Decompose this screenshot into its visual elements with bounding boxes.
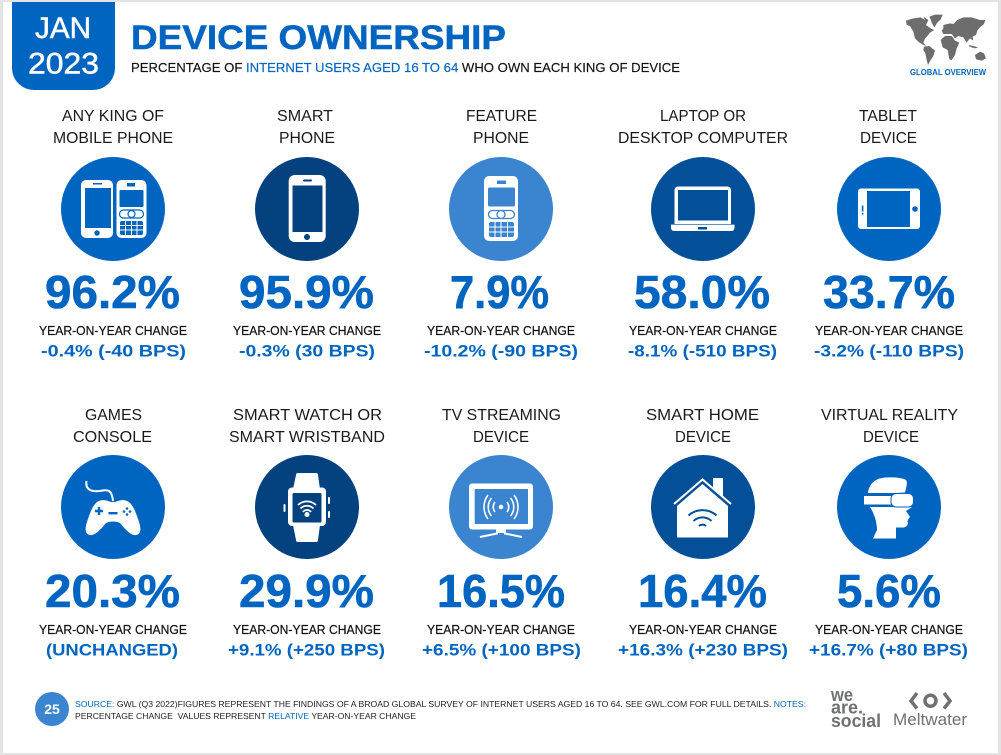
value: 16.4% (638, 565, 767, 617)
icon: tv streaming (449, 455, 553, 559)
panel: laptop or desktop computer (618, 108, 788, 360)
heading: CONSOLE (73, 429, 152, 446)
panel: any king of mobile phone (39, 108, 187, 360)
logo: we are social: social (831, 711, 881, 731)
heading: FEATURE (466, 108, 537, 125)
year-on-year label: YEAR-ON-YEAR CHANGE (233, 623, 381, 637)
heading: TABLET (859, 108, 917, 125)
value: 95.9% (239, 266, 374, 318)
icon: feature phone (449, 157, 553, 261)
global overview label: GLOBAL OVERVIEW (910, 68, 986, 77)
year-on-year label: YEAR-ON-YEAR CHANGE (427, 623, 575, 637)
icon: tablet (837, 157, 941, 261)
icon: world map (906, 15, 986, 65)
date badge: JAN (35, 12, 91, 45)
subtitle: PERCENTAGE OF INTERNET USERS AGED 16 TO 64 WHO OWN EACH KING OF DEVICE (131, 60, 680, 75)
change: +9.1% (+250 BPS) (228, 642, 385, 660)
value: 29.9% (239, 565, 374, 617)
change: (UNCHANGED) (46, 642, 178, 660)
change: -3.2% (-110 BPS) (814, 342, 964, 360)
heading: PHONE (473, 130, 529, 147)
date badge (12, 2, 115, 90)
heading: DESKTOP COMPUTER (618, 130, 788, 147)
panel: virtual reality device (809, 407, 968, 660)
icon: smart watch (255, 455, 359, 559)
panel: games console (39, 407, 187, 660)
change: -0.3% (30 BPS) (239, 342, 375, 360)
panel: smart phone (233, 108, 381, 360)
change: -0.4% (-40 BPS) (41, 342, 186, 360)
icon: laptop (651, 157, 755, 261)
icon: smartphone and feature phone (61, 157, 165, 261)
date badge: 2023 (28, 48, 99, 80)
heading: DEVICE (863, 429, 919, 446)
value: 20.3% (45, 565, 180, 617)
page number: 25 (44, 701, 60, 717)
year-on-year label: YEAR-ON-YEAR CHANGE (233, 324, 381, 338)
heading: DEVICE (473, 429, 529, 446)
icon: vr headset (837, 455, 941, 559)
year-on-year label: YEAR-ON-YEAR CHANGE (427, 324, 575, 338)
heading: SMART WRISTBAND (229, 429, 385, 446)
logo: we are social: are. (831, 698, 863, 718)
change: +6.5% (+100 BPS) (422, 642, 581, 660)
footer source note: PERCENTAGE CHANGE VALUES REPRESENT RELATIVE YEAR-ON-YEAR CHANGE (75, 711, 415, 721)
heading: ANY KING OF (62, 108, 164, 125)
value: 33.7% (823, 266, 955, 318)
icon: smartphone (255, 157, 359, 261)
panel: tablet device (814, 108, 964, 360)
panel: tv streaming device (422, 407, 581, 660)
icon: smart home (651, 455, 755, 559)
value: 58.0% (634, 266, 770, 318)
heading: DEVICE (675, 429, 731, 446)
year-on-year label: YEAR-ON-YEAR CHANGE (39, 324, 187, 338)
logo: meltwater: Meltwater (893, 710, 967, 729)
heading: PHONE (279, 130, 335, 147)
panel: feature phone (424, 108, 578, 360)
change: -8.1% (-510 BPS) (628, 342, 777, 360)
panel: smart home device (618, 407, 788, 660)
page number (35, 692, 69, 726)
heading: SMART HOME (646, 407, 759, 424)
year-on-year label: YEAR-ON-YEAR CHANGE (629, 623, 777, 637)
heading: TV STREAMING (442, 407, 561, 424)
change: -10.2% (-90 BPS) (424, 342, 578, 360)
heading: DEVICE (860, 130, 917, 147)
logo: we are social: we (830, 685, 853, 705)
value: 7.9% (450, 266, 549, 318)
change: +16.3% (+230 BPS) (618, 642, 788, 660)
heading: MOBILE PHONE (53, 130, 173, 147)
heading: SMART (277, 108, 333, 125)
title: DEVICE OWNERSHIP (131, 19, 506, 57)
heading: LAPTOP OR (660, 108, 746, 125)
value: 96.2% (45, 266, 180, 318)
year-on-year label: YEAR-ON-YEAR CHANGE (815, 623, 963, 637)
value: 16.5% (437, 565, 565, 617)
logo: meltwater (893, 693, 967, 729)
heading: GAMES (85, 407, 142, 424)
year-on-year label: YEAR-ON-YEAR CHANGE (815, 324, 963, 338)
year-on-year label: YEAR-ON-YEAR CHANGE (39, 623, 187, 637)
footer source note: SOURCE: GWL (Q3 2022)FIGURES REPRESENT THE FINDINGS OF A BROAD GLOBAL SURVEY OF INTERNET USERS AGED 16 TO 64. SEE GWL.COM FOR FULL DETAILS. NOTES: (75, 699, 805, 709)
year-on-year label: YEAR-ON-YEAR CHANGE (629, 324, 777, 338)
heading: VIRTUAL REALITY (821, 407, 958, 424)
icon: game controller (61, 455, 165, 559)
heading: SMART WATCH OR (233, 407, 382, 424)
value: 5.6% (837, 565, 941, 617)
panel: smart watch or smart wristband (228, 407, 385, 660)
change: +16.7% (+80 BPS) (809, 642, 968, 660)
